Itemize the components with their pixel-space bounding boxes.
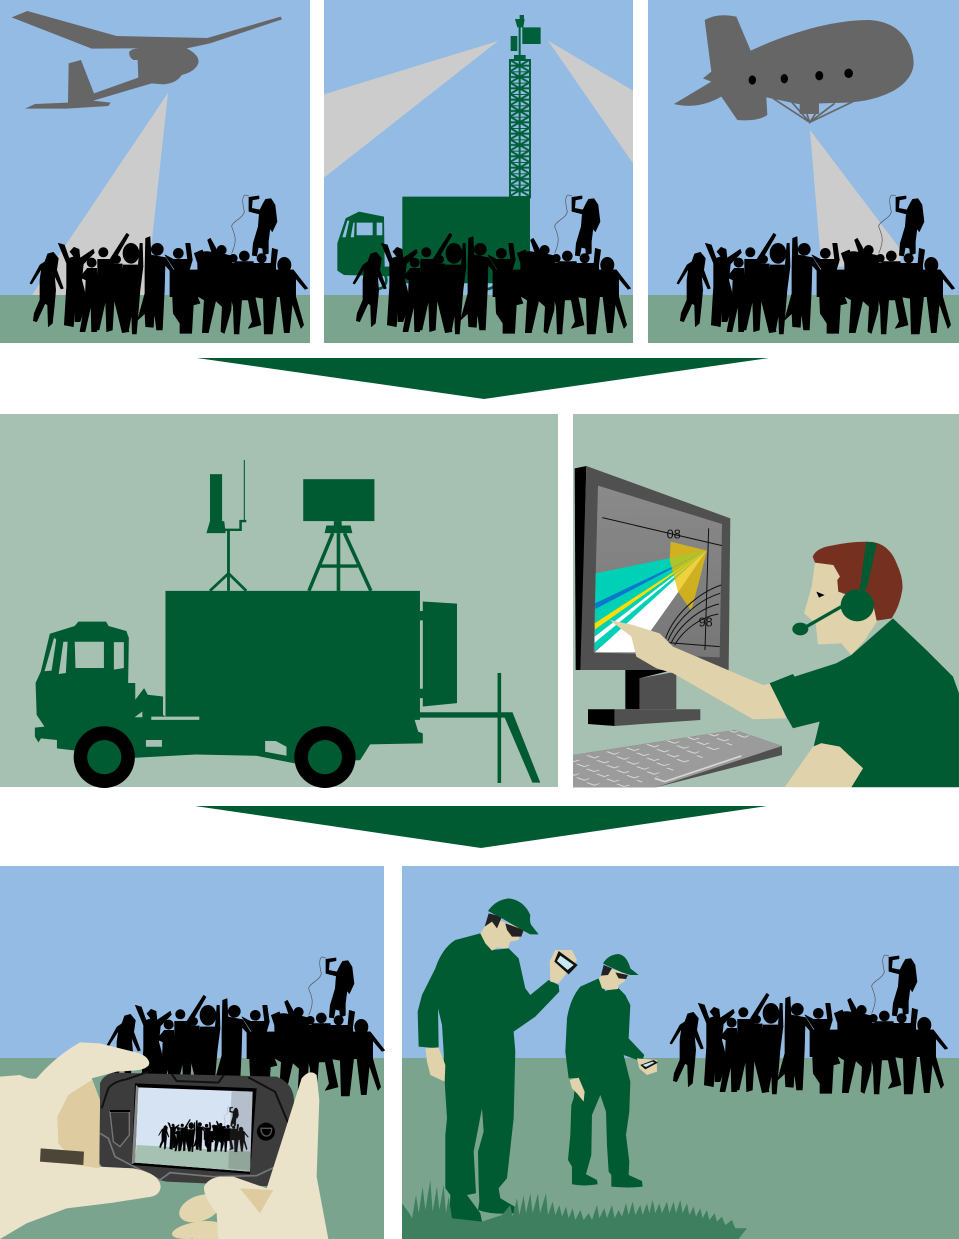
left hand xyxy=(0,1042,161,1239)
operator thigh xyxy=(785,743,863,787)
right hand fingers xyxy=(171,1189,225,1239)
panel: operator at monitor xyxy=(573,414,959,787)
map label 98: 98 xyxy=(699,616,713,630)
operator torso xyxy=(770,618,959,787)
operator arm xyxy=(610,620,786,719)
panel: airship over crowd xyxy=(648,0,959,343)
monitor stand xyxy=(588,670,700,726)
crowd with singer xyxy=(107,957,385,1096)
crowd with singer xyxy=(677,195,955,334)
soldier: short xyxy=(565,954,658,1187)
crowd with singer xyxy=(30,195,308,334)
right hand thumb xyxy=(204,1072,328,1239)
sensor beam from drone xyxy=(32,93,168,295)
panel: phone view of crowd xyxy=(0,866,385,1239)
keyboard xyxy=(573,730,782,787)
panel: mobile command truck xyxy=(0,414,558,788)
crowd with singer xyxy=(353,195,631,334)
map label 08: 08 xyxy=(667,527,681,541)
icon: drone aircraft xyxy=(12,11,282,109)
panel: radio mast over crowd xyxy=(324,0,633,343)
panel: drone over crowd xyxy=(0,0,310,343)
phone xyxy=(99,1072,294,1187)
operator head with headset xyxy=(792,542,903,655)
monitor screen xyxy=(575,466,730,670)
arrow: second down arrow xyxy=(195,806,767,848)
crowd with singer xyxy=(670,955,948,1094)
mini crowd on phone screen xyxy=(158,1107,249,1152)
soldier: tall xyxy=(418,898,578,1223)
hands holding phone xyxy=(0,1042,328,1239)
mast truck and beams xyxy=(324,15,633,289)
truck with antennas xyxy=(35,460,540,788)
airship and beam xyxy=(674,15,914,267)
panel: field personnel with handhelds xyxy=(402,866,959,1239)
grass xyxy=(402,1180,747,1239)
arrow: first down arrow xyxy=(197,358,769,399)
